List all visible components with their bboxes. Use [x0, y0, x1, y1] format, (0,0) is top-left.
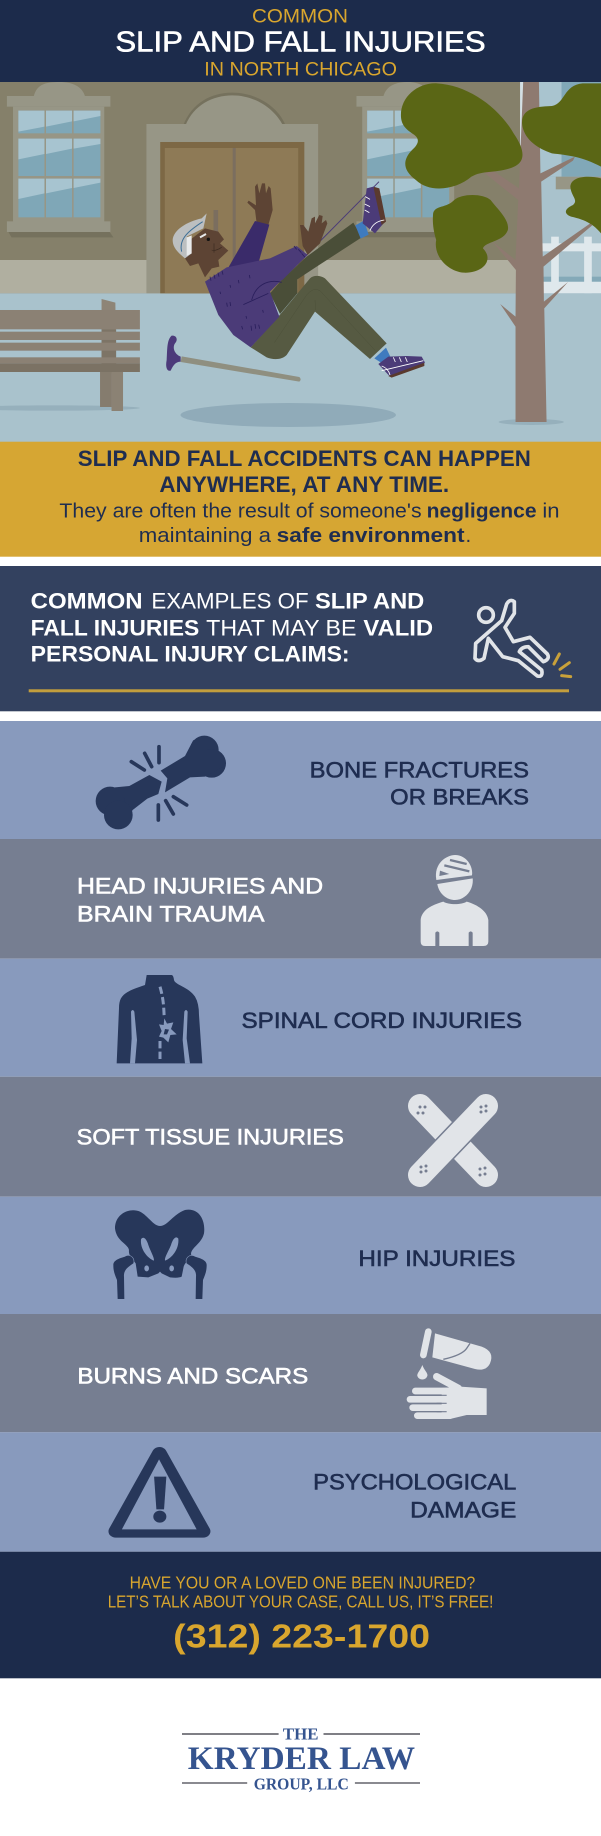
- intro panel: common examples: [0, 566, 601, 711]
- label: SPINAL CORD INJURIES: [242, 1008, 522, 1033]
- statement headline: [78, 446, 531, 497]
- door surround: [146, 93, 318, 293]
- intro heading: COMMON: [31, 589, 143, 614]
- building wall: [0, 82, 521, 295]
- row: hip injuries: [0, 1197, 601, 1314]
- statement body: They are often the result of someone's: [59, 499, 422, 522]
- illustration: man slipping outside a building: [0, 82, 601, 442]
- cta text: [108, 1573, 493, 1611]
- logo: the kryder law group: GROUP, LLC: [254, 1774, 349, 1793]
- scene beyond building: [520, 82, 601, 295]
- statement headline: ANYWHERE, AT ANY TIME.: [159, 472, 449, 497]
- icon: broken bone: [96, 736, 226, 829]
- call to action footer: [0, 1552, 601, 1678]
- label: SOFT TISSUE INJURIES: [77, 1125, 344, 1150]
- statement body: in: [542, 499, 560, 522]
- intro heading: THAT MAY BE: [206, 615, 356, 640]
- label: [310, 757, 529, 810]
- plinth: [0, 260, 521, 293]
- statement body: safe environment: [277, 524, 465, 547]
- intro heading: SLIP AND: [315, 589, 424, 614]
- phone number: (312) 223-1700: [173, 1618, 430, 1655]
- icon: pelvis and femurs: [113, 1210, 207, 1299]
- icon: chemical drip on hand: [410, 1332, 491, 1419]
- statement body: [59, 499, 560, 547]
- label: BURNS AND SCARS: [77, 1364, 308, 1389]
- intro heading: FALL INJURIES: [31, 615, 199, 640]
- row: burns and scars: [0, 1314, 601, 1432]
- label: [77, 874, 323, 927]
- label: HIP INJURIES: [358, 1246, 516, 1271]
- cane: [166, 336, 301, 382]
- statement body: maintaining a: [139, 524, 272, 547]
- label: BRAIN TRAUMA: [77, 902, 265, 927]
- statement headline: SLIP AND FALL ACCIDENTS CAN HAPPEN: [78, 446, 531, 471]
- icon: back with spine: [117, 975, 202, 1063]
- logo: the kryder law group: THE: [283, 1724, 318, 1743]
- front hand: [300, 215, 327, 255]
- icon: person with head bandage: [421, 855, 488, 946]
- back leg and raised shoe: [270, 182, 386, 314]
- sweater: [205, 246, 308, 347]
- label: OR BREAKS: [390, 785, 529, 810]
- tree: [401, 82, 601, 425]
- intro heading: VALID: [363, 615, 433, 640]
- logo: the kryder law group: [182, 1724, 420, 1793]
- label: HEAD INJURIES AND: [77, 874, 323, 899]
- row: psychological damage: [0, 1432, 601, 1552]
- left window: [7, 82, 113, 237]
- ground shadow under man: [181, 403, 396, 427]
- icon: falling person: [475, 600, 571, 677]
- intro heading: PERSONAL INJURY CLAIMS:: [31, 642, 350, 667]
- label: PSYCHOLOGICAL: [313, 1470, 516, 1495]
- statement body: negligence: [427, 499, 537, 522]
- falling man with cane: [166, 182, 425, 382]
- back arm and hand: [226, 183, 273, 272]
- intro heading: [31, 589, 433, 667]
- title: common: COMMON: [252, 6, 348, 28]
- pavement: [0, 293, 601, 442]
- row: spinal cord injuries: [0, 959, 601, 1077]
- right window: [356, 82, 454, 237]
- head: [173, 213, 228, 277]
- cta text: HAVE YOU OR A LOVED ONE BEEN INJURED?: [130, 1573, 475, 1593]
- gold statement panel: [0, 442, 601, 557]
- row: head injuries: [0, 839, 601, 959]
- label: [313, 1470, 516, 1523]
- cta text: LET’S TALK ABOUT YOUR CASE, CALL US, IT’S FREE!: [108, 1591, 493, 1611]
- logo: the kryder law group: KRYDER LAW: [188, 1741, 415, 1777]
- front leg and shoe: [251, 276, 425, 378]
- statement body: .: [466, 524, 471, 547]
- title: slip and fall injuries: SLIP AND FALL INJURIES: [115, 26, 486, 58]
- intro heading: EXAMPLES OF: [151, 589, 309, 614]
- icon: crossed bandages: [416, 1104, 488, 1176]
- label: BONE FRACTURES: [310, 757, 529, 782]
- title: in north chicago: IN NORTH CHICAGO: [204, 59, 397, 81]
- row: bone fractures: [0, 721, 601, 839]
- label: DAMAGE: [410, 1498, 516, 1523]
- icon: warning triangle: [116, 1453, 203, 1531]
- bench: [0, 299, 140, 411]
- row: soft tissue injuries: [0, 1077, 601, 1197]
- header banner: [0, 0, 601, 82]
